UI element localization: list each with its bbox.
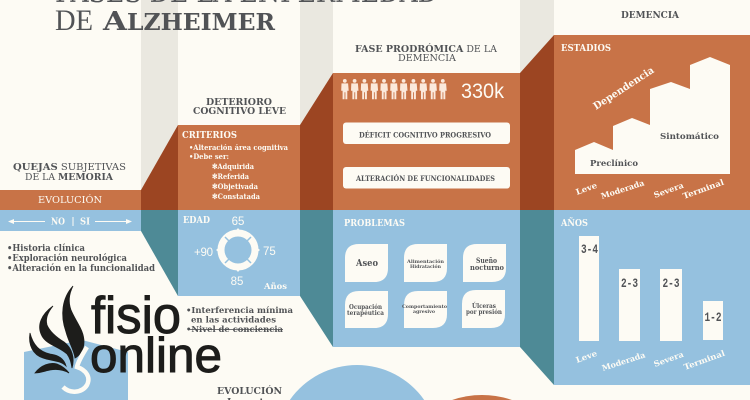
stage heading: fase prodrómica: DEMENCIA bbox=[398, 53, 456, 64]
panel: edad ring bbox=[183, 216, 288, 291]
panel: problemas: Aseo bbox=[355, 259, 378, 269]
panel: problemas: Comportamiento bbox=[402, 304, 448, 310]
shape: lower blue circle bbox=[290, 365, 424, 400]
stage heading: deterioro cognitivo leve bbox=[193, 97, 286, 117]
chart: staircase of stages: Leve bbox=[574, 180, 598, 197]
panel: problemas bbox=[344, 219, 506, 328]
stage heading: fase prodrómica: FASE PRODRÓMICA DE LA bbox=[355, 43, 497, 55]
callout: alteración de funcionalidades bbox=[343, 167, 510, 188]
chart: staircase of stages: Dependencia bbox=[592, 65, 657, 113]
title: DE bbox=[55, 4, 93, 37]
panel: problemas: Alimentación bbox=[406, 258, 444, 265]
icon row: 330k people bbox=[341, 79, 504, 103]
heading: evolución impacto: EVOLUCIÓN bbox=[217, 385, 282, 397]
text block: criterios: •Debe ser: bbox=[189, 152, 229, 161]
logo: fisio online: online bbox=[90, 329, 222, 383]
chart: staircase of stages: Sintomático bbox=[660, 131, 719, 142]
text block: criterios: ✻Objetivada bbox=[212, 182, 258, 191]
panel: edad ring: 85 bbox=[231, 276, 243, 288]
panel: edad ring: 75 bbox=[263, 246, 276, 258]
logo: fisio online: fisio bbox=[91, 287, 181, 345]
panel: problemas: nocturno bbox=[470, 263, 504, 272]
chart: años bars: 2-3 bbox=[621, 277, 638, 291]
panel: problemas: Ocupación bbox=[349, 304, 383, 311]
text block: interferencia: en las actividades bbox=[191, 316, 276, 326]
panel: orange band bbox=[0, 35, 750, 210]
chart: años bars: AÑOS bbox=[560, 217, 588, 229]
panel: problemas: por presión bbox=[466, 309, 503, 316]
chart: staircase of stages: Terminal bbox=[681, 177, 725, 201]
label: evolución: EVOLUCIÓN bbox=[38, 194, 102, 206]
callout: alteración de funcionalidades: ALTERACIÓN DE FUNCIONALIDADES bbox=[355, 174, 495, 183]
chart: años bars: 2-3 bbox=[662, 277, 680, 291]
panel: problemas: Úlceras bbox=[472, 302, 497, 310]
shape: lower blue block bbox=[24, 340, 128, 400]
text block: criterios: ✻Constatada bbox=[212, 192, 260, 201]
chart: staircase of stages: Severa bbox=[652, 180, 685, 200]
logo: fisio online bbox=[30, 286, 222, 392]
chart: años bars bbox=[560, 217, 726, 373]
text block: criterios: CRITERIOS bbox=[182, 130, 237, 141]
text block: criterios: ✻Referida bbox=[212, 172, 249, 181]
text block: interferencia: •Interferencia mínima bbox=[186, 305, 293, 316]
panel: column shading bbox=[141, 0, 554, 190]
chart: staircase of stages bbox=[574, 57, 730, 201]
panel: edad ring: Años bbox=[263, 281, 288, 291]
stage heading: quejas subjetivas: DE LA MEMORIA bbox=[25, 173, 114, 183]
panel: problemas: PROBLEMAS bbox=[344, 219, 405, 229]
shape: lower orange circle bbox=[452, 395, 512, 400]
chart: años bars: Moderada bbox=[601, 349, 646, 373]
panel: edad ring: EDAD bbox=[183, 216, 210, 226]
strike line: nivel de conciencia bbox=[190, 328, 283, 331]
chart: años bars: 1-2 bbox=[704, 311, 722, 325]
stage heading: deterioro cognitivo leve: DETERIORO bbox=[206, 97, 272, 108]
stage heading: fase prodrómica bbox=[355, 43, 497, 64]
chart: años bars: Severa bbox=[652, 349, 685, 369]
panel: blue band bbox=[0, 210, 750, 385]
text block: interferencia: •Nivel de conciencia bbox=[186, 325, 283, 335]
text block: criterios: •Alteración área cognitiva bbox=[189, 143, 288, 152]
text block: evolución list bbox=[7, 243, 156, 274]
stage heading: demencia: DEMENCIA bbox=[621, 10, 680, 21]
text block: evolución list: •Alteración en la funcionalidad bbox=[7, 263, 156, 274]
title: A bbox=[102, 7, 128, 37]
stage heading: deterioro cognitivo leve: COGNITIVO LEVE bbox=[193, 106, 286, 117]
label: estadios: ESTADIOS bbox=[561, 44, 611, 54]
arrow: no / si scale: NO bbox=[51, 218, 65, 228]
chart: staircase of stages: Moderada bbox=[600, 177, 645, 201]
panel: edad ring: +90 bbox=[194, 247, 213, 259]
stage heading: quejas subjetivas: QUEJAS SUBJETIVAS bbox=[13, 163, 126, 173]
arrow: no / si scale bbox=[8, 217, 132, 228]
text block: criterios: ✻Adquirida bbox=[212, 162, 254, 171]
panel: problemas: agresivo bbox=[413, 309, 436, 315]
text block: interferencia bbox=[186, 305, 293, 335]
chart: años bars: 3-4 bbox=[581, 243, 598, 257]
chart: años bars: Leve bbox=[574, 348, 598, 365]
icon row: 330k people: 330k bbox=[461, 80, 504, 103]
callout: déficit cognitivo progresivo bbox=[343, 122, 510, 144]
panel: problemas: Hidratación bbox=[410, 263, 441, 270]
title: LZHEIMER bbox=[127, 9, 276, 36]
arrow: no / si scale: SI bbox=[80, 218, 90, 228]
panel: edad ring: 65 bbox=[232, 216, 244, 228]
panel: problemas: terapéutica bbox=[347, 310, 384, 317]
chart: años bars: Terminal bbox=[682, 348, 726, 372]
text block: evolución list: •Historia clínica bbox=[7, 243, 85, 254]
stage heading: quejas subjetivas bbox=[13, 163, 126, 183]
callout: déficit cognitivo progresivo: DÉFICIT COGNITIVO PROGRESIVO bbox=[359, 130, 491, 140]
text block: evolución list: •Exploración neurológica bbox=[7, 253, 127, 264]
text block: criterios bbox=[182, 130, 288, 201]
panel: problemas: Sueño bbox=[476, 256, 497, 265]
chart: staircase of stages: Preclínico bbox=[590, 158, 638, 169]
title bbox=[55, 0, 438, 37]
